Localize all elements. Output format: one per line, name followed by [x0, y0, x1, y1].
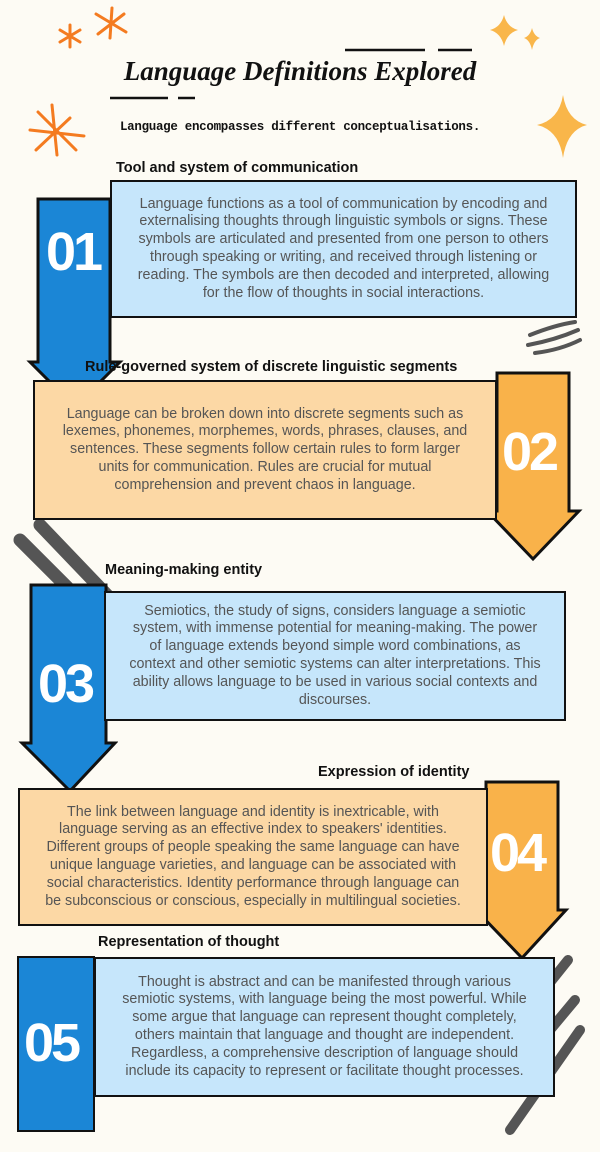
section 3 — [18, 562, 566, 788]
heading 4: Expression of identity — [318, 764, 469, 780]
heading 5: Representation of thought — [98, 934, 279, 950]
arrow 1 — [26, 198, 124, 380]
subtitle: Language encompasses different conceptualisations. — [120, 120, 480, 134]
heading 2: Rule-governed system of discrete linguistic segments — [85, 359, 457, 375]
arrow 3 — [18, 584, 118, 788]
number 04: 04 — [490, 823, 544, 883]
box 5: Thought is abstract and can be manifested through various semiotic systems, with language being the most powerful. While some argue that language can represent thought completely, others maintain that language and thought are independent. Regardless, a comprehensive description of language should include its capacity to represent or facilitate thought processes. — [122, 974, 527, 1079]
box 2 — [33, 380, 497, 520]
section 2 — [33, 359, 582, 561]
arrow 4 — [484, 780, 570, 957]
box 2: Language can be broken down into discrete segments such as lexemes, phonemes, morphemes, words, phrases, clauses, and sentences. These segments follow certain rules to form larger units for communication. Rules are crucial for mutual comprehension and prevent chaos in language. — [63, 406, 467, 493]
decorative stars — [28, 6, 587, 158]
box 3: Semiotics, the study of signs, considers language a semiotic system, with immense potential for meaning-making. The power of language extends beyond simple word combinations, as context and other semiotic systems can alter interpretations. This ability allows language to be used in various social contexts and discourses. — [129, 603, 541, 708]
arrow 2 — [494, 372, 582, 561]
box 4: The link between language and identity is inextricable, with language serving as an effective index to speakers' identities. Different groups of people speaking the same language can have unique language varieties, and language can be associated with social characteristics. Identity performance through language can be subconscious or conscious, especially in multilingual societies. — [45, 804, 461, 909]
section 4 — [18, 764, 570, 957]
box 1: Language functions as a tool of communication by encoding and externalising thoughts through linguistic symbols or signs. These symbols are articulated and presented from one person to others through speaking or writing, and received through listening or reading. The symbols are then decoded and interpreted, allowing for the flow of thoughts in social interactions. — [138, 196, 549, 301]
number 02: 02 — [502, 422, 556, 482]
heading 3: Meaning-making entity — [105, 562, 262, 578]
number 03: 03 — [38, 654, 92, 714]
box 1 — [110, 180, 577, 318]
section 5 — [17, 934, 555, 1132]
heading 1: Tool and system of communication — [116, 160, 358, 176]
block 5 — [17, 956, 95, 1132]
title: Language Definitions Explored — [124, 56, 476, 86]
box 5 — [94, 957, 555, 1097]
number 01: 01 — [46, 222, 100, 282]
section 1 — [26, 160, 577, 380]
box 4 — [18, 788, 488, 926]
number 05: 05 — [24, 1013, 78, 1073]
